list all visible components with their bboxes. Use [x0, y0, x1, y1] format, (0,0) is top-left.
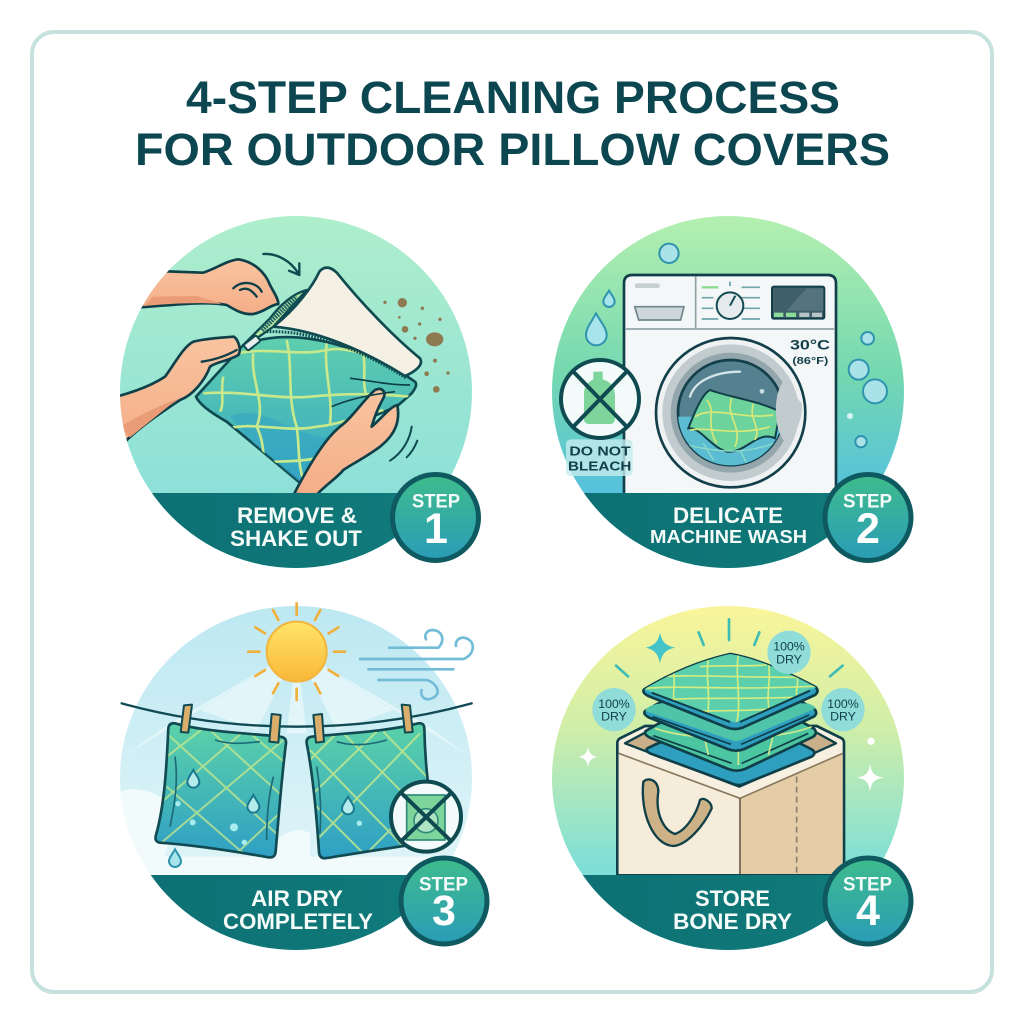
dry badges: DRY [601, 710, 627, 724]
panel: step 3 air dry completely [117, 603, 487, 951]
hands [110, 259, 410, 495]
step 1 label banner: SHAKE OUT [230, 526, 363, 551]
title: FOR OUTDOOR PILLOW COVERS [135, 124, 890, 175]
motion arrow [263, 254, 299, 275]
clothespins [181, 705, 413, 743]
bottom pillow [647, 725, 814, 785]
step 1 illustration [110, 216, 472, 568]
no tumble dryer icon [391, 782, 461, 852]
step 2 label banner: DELICATE [673, 503, 783, 528]
hand left [110, 337, 240, 443]
sun rays background and clouds [117, 650, 477, 877]
temperature label: 30°C [790, 336, 830, 352]
step 3 background circle [120, 606, 472, 950]
step 1 background circle [120, 216, 472, 568]
box handle [643, 779, 712, 846]
white pillow [273, 268, 421, 376]
hand right [294, 389, 398, 495]
step 3 illustration [120, 602, 474, 875]
step 1 label banner: REMOVE & [237, 503, 357, 528]
title: 4-STEP CLEANING PROCESS [186, 72, 840, 123]
no bleach icon: BLEACH [568, 459, 631, 473]
step 3 label banner [150, 875, 407, 950]
step 4 label banner: BONE DRY [673, 909, 792, 934]
dry badges: DRY [830, 710, 856, 724]
washing machine [624, 275, 836, 497]
sun [248, 603, 345, 700]
zipper teeth [267, 332, 407, 378]
sparkles [579, 633, 884, 792]
step 3 badge: STEP [419, 874, 468, 896]
second pillow [644, 676, 816, 751]
title [135, 72, 890, 175]
step 4 badge [825, 858, 911, 944]
panel: step 4 store bone dry [552, 606, 911, 951]
step 4 badge: 4 [856, 887, 880, 935]
falling drop [169, 849, 181, 867]
step 4 background circle [552, 606, 904, 950]
step 2 badge: STEP [843, 492, 892, 512]
clothesline [122, 703, 472, 727]
washer door [656, 338, 805, 487]
step 2 background circle [552, 216, 904, 568]
dry badges: 100% [827, 697, 859, 711]
motion ticks [616, 619, 843, 676]
step 3 badge [401, 858, 487, 944]
step 4 badge: STEP [843, 874, 892, 896]
step 4 label banner: STORE [695, 886, 770, 911]
step 3 badge: 3 [432, 887, 456, 935]
step 1 badge [392, 474, 478, 560]
stacked pillows [643, 654, 820, 785]
hanging pillow right [307, 723, 439, 858]
step 2 badge: 2 [856, 505, 880, 553]
step 2 label banner: MACHINE WASH [650, 527, 807, 547]
hand top [130, 259, 278, 314]
step 3 label banner: COMPLETELY [223, 909, 373, 934]
step 1 badge: 1 [424, 505, 448, 553]
bubbles [659, 244, 887, 447]
panel: step 1 remove and shake out [110, 216, 478, 569]
dial and controls [702, 282, 760, 319]
storage box [617, 726, 844, 875]
step 1 badge: STEP [412, 492, 460, 512]
step 3 label banner: AIR DRY [251, 886, 343, 911]
dry badges: DRY [776, 652, 802, 666]
top pillow [643, 654, 817, 729]
pillow cover with grid [196, 337, 416, 488]
dry badges: 100% [598, 697, 630, 711]
wind [360, 630, 473, 699]
dry badges [592, 631, 865, 731]
dirt specks [383, 298, 450, 393]
panel: step 2 delicate machine wash [552, 216, 911, 569]
step 2 label banner [584, 493, 830, 568]
step 4 illustration [552, 606, 904, 950]
step 4 label banner [582, 875, 830, 950]
step 1 label banner [152, 493, 398, 568]
hanging pillow left [155, 723, 290, 857]
shake motion lines [390, 427, 417, 461]
no bleach icon [561, 360, 639, 476]
third pillow [645, 696, 816, 771]
no bleach icon: DO NOT [569, 444, 631, 458]
water drops [586, 291, 615, 345]
step 2 badge [825, 474, 911, 560]
zipper pull [243, 335, 261, 351]
temperature label [790, 336, 830, 367]
display screen [772, 287, 824, 319]
step 2 illustration [552, 216, 904, 568]
temperature label: (86°F) [792, 356, 828, 367]
dry badges: 100% [773, 640, 805, 654]
